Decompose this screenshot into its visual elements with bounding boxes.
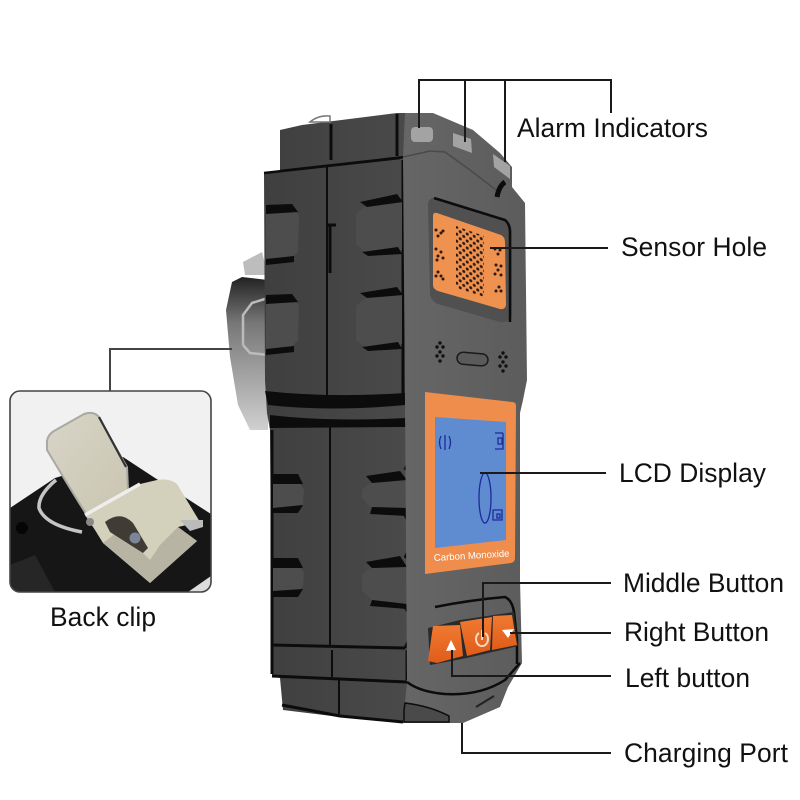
LCD symbols: [440, 433, 503, 523]
label: back clip: Back clip: [50, 602, 156, 632]
label: sensor hole: Sensor Hole: [621, 232, 767, 262]
upper plate: [47, 413, 128, 515]
side grip blocks: [266, 194, 407, 609]
label: left button: Left button: [625, 663, 750, 693]
device body: [264, 113, 527, 723]
label: LCD display: LCD Display: [619, 458, 767, 488]
label: right button: Right Button: [624, 617, 769, 647]
back clip photo: [10, 391, 211, 592]
label: middle button: Middle Button: [623, 568, 784, 598]
D ring: [39, 480, 82, 532]
LCD panel: [425, 392, 516, 574]
leader lines: [110, 80, 611, 753]
left side housing: [264, 113, 412, 723]
label: charging port: Charging Port: [624, 738, 789, 768]
button recess: [435, 597, 517, 664]
front face: [403, 113, 527, 723]
lower plate and hinge: [85, 480, 200, 583]
orange sensor plate: [433, 213, 506, 309]
speaker holes and slot: [435, 341, 508, 373]
alarm indicators: [411, 127, 510, 179]
orange buttons: [428, 612, 518, 665]
black base: [10, 457, 211, 592]
LCD caption: Carbon Monoxide: [434, 549, 510, 564]
back clip on device: [226, 252, 268, 430]
sensor window: [428, 198, 512, 322]
label: alarm indicators: Alarm Indicators: [517, 113, 708, 143]
